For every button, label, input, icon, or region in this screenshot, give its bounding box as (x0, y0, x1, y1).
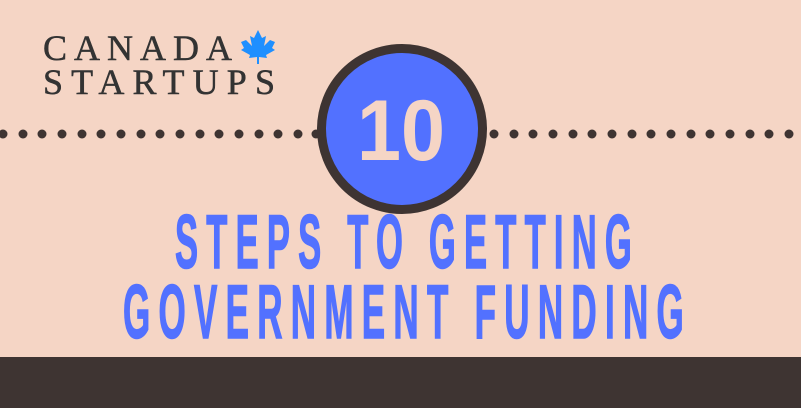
logo: Canada Startups: STARTUPS (43, 62, 275, 102)
dotted line left (0, 130, 320, 138)
icon: maple leaf (241, 30, 275, 64)
number badge: 10: 10 (357, 83, 445, 179)
logo: Canada Startups: CANADA (43, 28, 232, 68)
number badge: 10 (322, 48, 482, 210)
title (123, 200, 692, 355)
logo: Canada Startups (43, 28, 275, 102)
dotted line right (490, 130, 794, 138)
footer band (0, 357, 801, 408)
